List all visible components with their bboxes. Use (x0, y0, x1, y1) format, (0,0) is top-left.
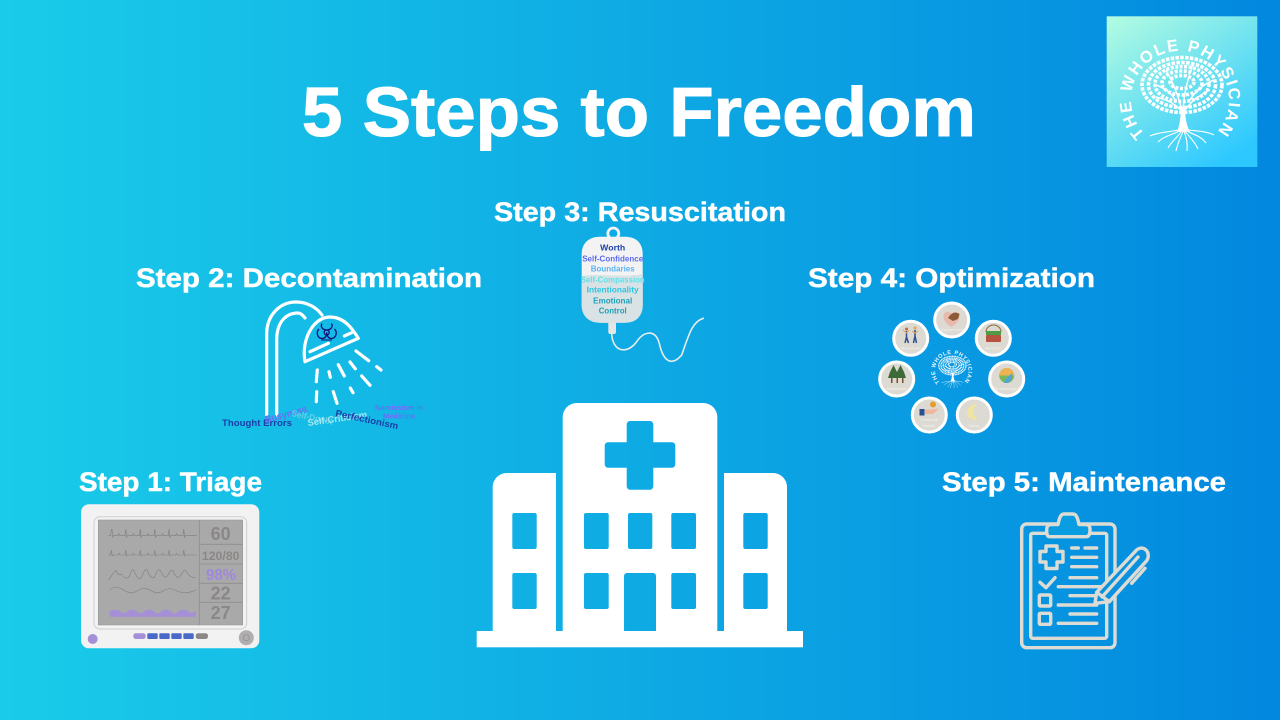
wheel circles (880, 303, 1024, 432)
IV bag word list: Self-Confidence (582, 255, 644, 264)
IV bag word list: Boundaries (591, 265, 635, 274)
wheel labels: Connection (941, 327, 963, 332)
icon: movement people (903, 326, 918, 343)
vital readings: 27 (211, 603, 231, 623)
word cloud: thought patterns: Medicine (383, 412, 415, 420)
icon: environment landscape (999, 368, 1014, 383)
IV bag word list (581, 244, 645, 315)
icon: decontamination shower (222, 302, 423, 432)
word cloud: thought patterns: Perfectionism (334, 408, 399, 432)
vital readings: 120/80 (202, 551, 240, 563)
title: 5 Steps to Freedom (302, 73, 976, 151)
icon: patient monitor (81, 504, 259, 648)
heading: step 4: Step 4: Optimization (808, 263, 1095, 293)
wheel labels: Sleep (969, 423, 980, 428)
word cloud: thought patterns: Busyness (264, 404, 309, 426)
IV bag word list: Control (599, 306, 627, 315)
icon: biohazard symbol (317, 324, 336, 340)
vital readings: 98% (206, 567, 236, 584)
waveforms (108, 529, 197, 593)
IV bag word list: Intentionality (587, 286, 639, 295)
heading: step 5: Step 5: Maintenance (942, 467, 1226, 497)
heading: step 2: Step 2: Decontamination (136, 263, 482, 293)
wheel labels: Movement (901, 346, 921, 350)
wellness wheel (878, 302, 1026, 434)
monitor controls (88, 630, 254, 645)
icon: resilience trees (888, 365, 906, 383)
wheel labels: Financial (921, 417, 938, 422)
icon: clipboard checklist (1022, 514, 1148, 648)
wheel labels: Health (923, 423, 936, 428)
icon: connection heart (944, 312, 960, 327)
IV bag word list: Worth (600, 244, 625, 253)
icon: pencil (1095, 548, 1148, 603)
wheel labels: Environment (994, 386, 1020, 391)
icon: IV bag (581, 228, 703, 361)
hospital icon (477, 403, 803, 647)
icon: financial health hand (920, 402, 939, 416)
vital readings (202, 524, 240, 623)
word cloud: thought patterns: Self-Doubt (291, 408, 334, 427)
vital readings: 60 (211, 524, 231, 544)
logo: The Whole Physician: THE WHOLE PHYSICIAN (1120, 39, 1240, 142)
word cloud: thought patterns: Thought Errors (222, 418, 292, 429)
wheel labels (887, 327, 1020, 428)
wheel labels: Nutrition (985, 346, 1002, 350)
icon: sleep moon (967, 404, 978, 420)
wheel labels: Resilience (887, 386, 907, 391)
IV bag word list: Self-Compassion (581, 276, 645, 285)
small tree logo: THE WHOLE PHYSICIAN (931, 350, 972, 385)
IV bag word list: Emotional (593, 296, 632, 305)
icon: nutrition basket (986, 325, 1001, 342)
heading: step 3: Step 3: Resuscitation (494, 197, 786, 227)
logo: The Whole Physician (1106, 16, 1258, 167)
word cloud: thought patterns (222, 403, 423, 432)
vital readings: 22 (211, 584, 231, 604)
word cloud: thought patterns: Narcissism in (375, 403, 423, 412)
word cloud: thought patterns: Self-Criticism (307, 410, 368, 429)
heading: step 1: Step 1: Triage (79, 467, 262, 497)
